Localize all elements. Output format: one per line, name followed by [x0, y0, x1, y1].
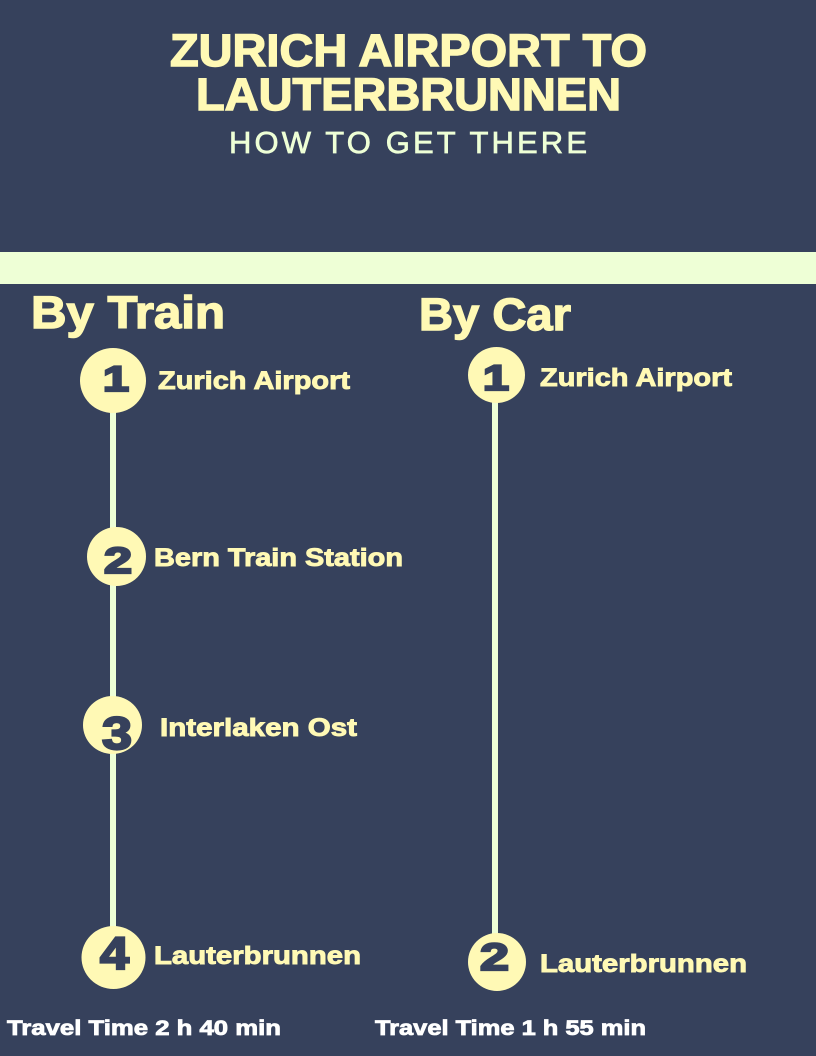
stop 2: Bern Train Station: Bern Train Station: [154, 544, 403, 572]
heading: by train: By Train: [31, 287, 225, 338]
stop 1: Zurich Airport: [80, 348, 351, 413]
stop 1: Zurich Airport: 1: [103, 360, 129, 399]
heading: by car: By Car: [419, 289, 571, 340]
title: ZURICH AIRPORT TO: [170, 25, 647, 76]
panel: by car: [375, 289, 747, 1040]
title: [170, 25, 647, 120]
stop 4: Lauterbrunnen: [82, 926, 361, 989]
train route line: [110, 405, 116, 935]
stop 3: Interlaken Ost: 3: [102, 708, 132, 759]
divider band: [0, 252, 816, 284]
stop 3: Interlaken Ost: Interlaken Ost: [160, 714, 358, 742]
stop 1: Zurich Airport: [468, 347, 733, 403]
stop 2: Lauterbrunnen: [468, 933, 747, 991]
stop 2: Lauterbrunnen: Lauterbrunnen: [540, 950, 747, 978]
travel time: train: Travel Time 2 h 40 min: [7, 1017, 281, 1040]
stop 4: Lauterbrunnen: Lauterbrunnen: [154, 942, 361, 970]
stop 2: Bern Train Station: [87, 527, 403, 586]
subtitle: HOW TO GET THERE: [229, 125, 587, 160]
stop 3: Interlaken Ost: [83, 696, 358, 759]
stop 1: Zurich Airport: 1: [483, 359, 509, 398]
stop 4: Lauterbrunnen: 4: [100, 928, 129, 979]
stop 1: Zurich Airport: Zurich Airport: [540, 364, 733, 392]
stop 2: Bern Train Station: 2: [104, 540, 132, 581]
panel: by train: [7, 287, 403, 1040]
car route line: [492, 395, 498, 940]
title: LAUTERBRUNNEN: [196, 69, 621, 120]
stop 1: Zurich Airport: Zurich Airport: [158, 367, 351, 395]
travel time: car: Travel Time 1 h 55 min: [375, 1017, 646, 1040]
stop 2: Lauterbrunnen: 2: [480, 937, 509, 979]
